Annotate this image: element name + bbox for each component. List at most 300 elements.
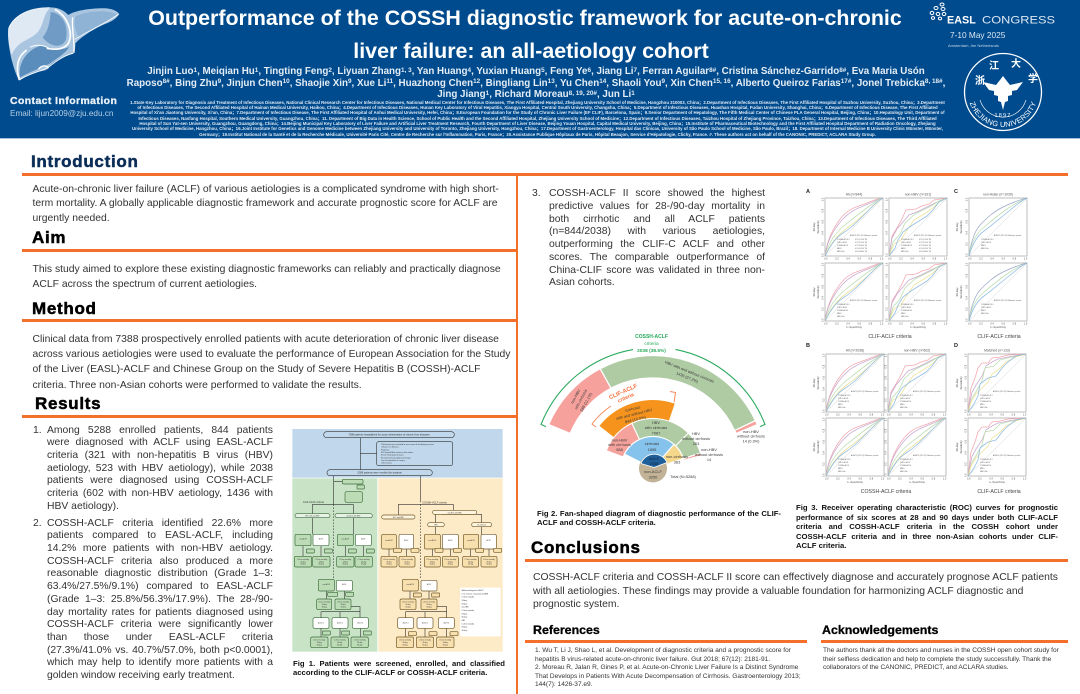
flow: labels: LT-free mortality <box>419 639 431 642</box>
panel B/D plots: 0.0 0.2 0.4 0.6 0.8 1.0 <box>825 478 885 480</box>
text: results item 2: patients compared to EASL-ACLF, including <box>47 530 273 541</box>
text: conclusions: prognostic system. <box>533 599 619 610</box>
panel A/C plots: AUROC (95% CI) Difference p value <box>850 299 877 302</box>
panel B/D plots: 1−Specificity <box>909 480 925 484</box>
text: results item 2: COSSH-ACLF criteria were significantly lower <box>47 619 273 630</box>
fan: labels: HBV <box>692 431 700 436</box>
panel B/D plots: 0.0 0.2 0.4 0.6 0.8 1.0 <box>887 478 947 480</box>
panel A/C plots: COSSH-ACLF <box>837 309 848 312</box>
flow: labels: 90-day <box>322 606 327 608</box>
panel A/C plots: 1−Specificity <box>910 325 926 329</box>
flow: labels: 28-day <box>340 604 346 606</box>
text: aim: This study aimed to explore these existing diagnostic frameworks can reliably and practically diagnose <box>32 264 501 275</box>
affiliations: of Infectious Diseases, The Second Affiliated Hospital of Hainan Medical University, Haikou, China；4.Department of Infectious Diseases, Hunan Key Laboratory of Viral Hepatitis, Xiangya Hospital, Central South University, Changsha, China；5.Department of Infectious Diseases, Huashan Hospital, Fudan University, Shanghai, China；6.Department of Infectious Disease, The First Affiliated <box>137 105 938 110</box>
panel A/C plots: CLIF-C ACLF <box>901 241 911 244</box>
panel B/D plots: 0.0 0.2 0.4 0.6 0.8 1.0 <box>822 353 826 413</box>
flow: labels: ACLF-2 <box>422 622 428 625</box>
fan: labels: with cirrhosis <box>645 425 667 430</box>
ROC axis labels: 90-day <box>812 287 816 296</box>
Fig 3 caption: performance of six scores at 28 and 90 days under both CLIF-ACLF <box>796 512 1058 522</box>
flow: labels: ACLF <box>427 583 431 586</box>
panel A/C plots: 0.0 0.2 0.4 0.6 0.8 1.0 <box>886 197 888 257</box>
panel A/C plots: 0.0 0.2 0.4 0.6 0.8 1.0 <box>888 258 948 260</box>
flow: labels: 28-day <box>486 561 492 563</box>
panel A/C plots: AUROC (95% CI) Difference p value <box>994 234 1021 237</box>
flow: labels: 90-day <box>430 564 435 566</box>
text: results item 3 <box>532 188 766 288</box>
flow: labels: 28-day <box>300 561 306 563</box>
contact information <box>10 96 117 118</box>
text: results item 2: than those under EASL-ACLF criteria <box>47 632 273 643</box>
panel B/D plots: AUROC (95% CI) Difference p value <box>993 454 1020 457</box>
flow: labels: LT-free mortality <box>334 639 346 642</box>
panel A/C plots: CLIF-C ACLF <box>837 306 847 309</box>
text: references <box>535 647 801 688</box>
heading: References: References <box>533 623 600 637</box>
ROC axis labels: 28-day <box>812 378 816 387</box>
flow: labels: LT-free mortality <box>315 558 327 561</box>
flow: labels: 90-day <box>317 644 322 646</box>
fan: outer ring COSSH-ACLF <box>549 356 757 433</box>
Fig 3 caption: COSSH-ACLF criteria and in three non-Asian cohorts under CLIF- <box>796 532 1058 540</box>
flow: labels: ACLF <box>404 539 408 542</box>
text: results item 3: (n=844/2038) with various aetiologies, <box>549 226 765 237</box>
panel B/D plots: MELD-Na <box>838 471 845 473</box>
panel A/C plots: 0.0 0.2 0.4 0.6 0.8 1.0 <box>966 262 968 322</box>
flow: labels: 90-day: <box>462 630 468 632</box>
text: acknowledgements: collaborators of the CANONIC, PREDICT, and ACLARA studies. <box>823 664 1009 671</box>
flow: labels: LT-free mortality <box>439 639 451 642</box>
fan: labels: 588 <box>616 447 623 452</box>
EASL congress logo: 7-10 May 2025 <box>950 30 1006 40</box>
panel B/D plots: MELD-Na <box>980 407 987 409</box>
panel B/D plots: COSSH-ACLF <box>900 400 911 403</box>
flow: labels: HCC with HBV <box>393 516 405 519</box>
panel A/C plots: 0.70 (0.67-0.73) <box>919 248 931 250</box>
panel B/D plots: 0.0 0.2 0.4 0.6 0.8 1.0 <box>964 353 968 413</box>
flow: yellow branch boxes <box>381 510 502 648</box>
text: acknowledgements <box>823 647 1059 671</box>
ROC axis labels: 28-day <box>955 378 959 387</box>
panel B/D plots: COSSH-ACLF II <box>838 394 851 397</box>
text: references: hepatitis B virus-related acute-on-chronic liver failure. Gut 2018; 67(12): 2181-91. <box>535 656 770 663</box>
panel B/D plots: MELD <box>900 468 905 470</box>
flow: labels: <18 years or >80 years <box>381 446 399 449</box>
affiliations: Infectious Diseases, Nanfang Hospital, Southern Medical University, Guangzhou, China；11. Department of Big Data in Health Science, School of Public Health and the Second Affiliated Hospital, Zhejiang University School of Medicine；12.Department of Infectious Diseases, Taizhou Hospital of Zhejiang Province, Taizhou, China；13.Department of Infectious Diseases, The Third Affiliated <box>138 116 937 121</box>
flow: labels: 28-day <box>405 604 411 606</box>
flow: labels: 90-day <box>422 644 428 646</box>
flow: labels: 28-day <box>337 642 342 644</box>
icon: Zhejiang University seal: 大 <box>1011 57 1021 70</box>
authors: Jinjin Luo1, Meiqian Hu1, Tingting Feng2, Liyuan Zhang1, 3, Yan Huang4, Yuxian Huang5, Feng Ye6, Jiang Li7, Ferran Aguilar8#, Cristina Sánchez-Garrido8#, Eva Maria Usón <box>147 66 925 77</box>
affiliations: Germany；19.Institut National de la Santé et de la Recherche Médicale, Université Paris Cité, Centre de Recherche sur l'Inflammation, Paris, France；20.Assistance Publique Hôpitaux de Paris, Hôpital Beaujon, Service d'Hépatologie, Clichy, France. #. These authors act on behalf of the CANONIC, PREDICT, ACLARA Study Group. <box>199 132 876 137</box>
icon: Zhejiang University seal: 学 <box>1028 72 1038 85</box>
panel A/C plots: COSSH-ACLF <box>901 244 912 247</box>
text: method: Clinical data from 7388 prospectively enrolled patients with acute deterioration of chronic liver disease <box>32 334 499 345</box>
fan: labels: 263 <box>693 441 699 446</box>
heading: Acknowledgements: Acknowledgements <box>822 623 938 637</box>
flow: labels: LT-free mortality <box>402 601 414 604</box>
Fig 2 fan diagram <box>540 334 766 482</box>
text: conclusions: with all aetiologies. These findings may provide a valuable foundation for harmonizing ACLF diagnostic and <box>533 586 1023 597</box>
panel B/D plots: 0.0 0.2 0.4 0.6 0.8 1.0 <box>884 353 888 413</box>
Fig 3 caption <box>796 503 1058 550</box>
text: introduction: urgently needed. <box>32 213 110 224</box>
flow: labels: 28-day: <box>462 600 468 602</box>
flow: labels: 90-day <box>486 564 492 566</box>
panel A/C plots: 0.0 0.2 0.4 0.6 0.8 1.0 <box>822 197 824 257</box>
panel A/C plots: AUROC (95% CI) Difference p value <box>914 234 941 237</box>
EASL congress logo: Amsterdam, the Netherlands <box>948 43 999 48</box>
flow: labels: non-ACLF <box>407 583 414 586</box>
flow: screening boxes <box>324 432 454 476</box>
flow: labels: ACLF <box>319 537 323 540</box>
flow: labels: ACLF <box>487 539 491 542</box>
flow: labels: LT-free mortality <box>313 639 325 642</box>
flow: labels: 2100 patients were excluded for one or more of the following reasons: <box>381 443 435 446</box>
flow: labels: 28-day <box>402 642 408 644</box>
panel B/D plots: 1−Specificity <box>847 480 863 484</box>
flow: labels: 90-day <box>443 644 448 646</box>
panel A/C plots: 0.75 (0.72-0.78) <box>855 239 867 241</box>
text: results item 1: criteria (602 with non-HBV aetiology, 1436 with <box>47 488 273 499</box>
panel B/D plots: CLIF-C ACLF <box>980 397 990 400</box>
flow: labels: HBV <box>434 525 439 527</box>
fan: labels: Total (N=5288) <box>670 474 697 479</box>
ROC panel captions: COSSH-ACLF criteria <box>861 489 911 495</box>
flow: labels: LT-free mortality <box>483 558 495 561</box>
fan: labels <box>568 334 765 480</box>
fan: labels: 14 (0.3%) <box>743 438 760 444</box>
flow: labels: ACLF-1 <box>318 622 324 625</box>
heading: Conclusions: Conclusions <box>531 538 641 557</box>
flow: labels: 28-day <box>448 561 453 563</box>
text: method: across various aetiologies were used to evaluate the performance of European Association for the Study <box>32 349 510 360</box>
EASL congress logo: EASL <box>947 14 976 26</box>
text: aim <box>32 264 501 290</box>
panel A/C plots: COSSH-ACLF II <box>837 303 850 306</box>
panel B/D plots: MELD <box>980 404 985 406</box>
flow: labels: non-ACLF <box>429 539 436 542</box>
flow: labels: Pregnancy <box>381 448 389 451</box>
ROC axis labels: 28-day <box>812 222 816 231</box>
flow: labels: 28-day: <box>462 627 468 629</box>
flow: labels: 90-day <box>357 644 362 646</box>
Fig 3 caption: Fig 3. Receiver operating characteristic (ROC) curves for prognostic <box>796 503 1058 512</box>
flow: labels: non-ACLF <box>385 539 393 542</box>
panel B/D plots: COSSH-ACLF <box>838 400 849 403</box>
panel B/D plots: 0.0 0.2 0.4 0.6 0.8 1.0 <box>967 478 1027 480</box>
text: conclusions: COSSH-ACLF criteria and COSSH-ACLF II score can effectively diagnose and accurately prognose ACLF patients <box>533 572 1058 583</box>
flow: labels: 90-day <box>405 606 411 608</box>
flow: labels: Additional diagnosis of ACLF <box>462 589 484 592</box>
header banner <box>0 0 1080 139</box>
panel letters: B <box>806 343 810 349</box>
text: results item 3: outperforming the CLIF-C ACLF and other <box>549 239 765 250</box>
flow: labels: 90-day <box>337 644 342 646</box>
panel A/C plots: CLIF-C ACLF <box>981 306 991 309</box>
panel B/D plots: MELD-Na <box>900 471 907 473</box>
panel A/C plots: COSSH-ACLF <box>837 244 848 247</box>
title <box>148 6 902 62</box>
panel letters: C <box>954 189 958 195</box>
text: references: That Develops in Patients With Acute Decompensation of Cirrhosis. Gastroenterology 2013; <box>535 673 801 680</box>
ROC panel captions: CLIF-ACLF criteria <box>977 489 1021 495</box>
flow: labels: LT-free mortality <box>383 558 395 561</box>
flow: labels: 28-day <box>422 642 428 644</box>
panel A/C plots: COSSH-ACLF <box>901 309 912 312</box>
panel A/C plots: 0.0 0.2 0.4 0.6 0.8 1.0 <box>968 322 1028 326</box>
text: acknowledgements: The authors thank all the doctors and nurses in the COSSH open cohort study for <box>823 647 1059 654</box>
flow: labels: 90-day <box>300 564 306 566</box>
flow: labels: LT-free mortality <box>423 601 435 604</box>
fan: labels: Cirrhosis <box>625 404 641 413</box>
panel A/C plots: CLIF-C ACLF <box>837 241 847 244</box>
flow: labels: LT-free mortality <box>462 609 474 612</box>
panel B/D plots: COSSH-ACLF II <box>900 394 913 397</box>
panel B/D plots: 0.0 0.2 0.4 0.6 0.8 1.0 <box>887 414 947 416</box>
panel B/D plots: COSSH-ACLF II <box>980 394 993 397</box>
panel A/C plots: 0.0 0.2 0.4 0.6 0.8 1.0 <box>824 258 884 260</box>
fan: labels: criteria <box>644 341 659 347</box>
text: results item 3: scores. The comparable outperformance of <box>549 252 765 263</box>
ROC axis labels: Sensitivity <box>959 220 963 234</box>
ROC axis labels: Sensitivity <box>959 376 963 390</box>
text: results item 2: (Grade 1–3: 25.8%/56.3%/17.9%). The 28-/90- <box>47 594 273 605</box>
fan: labels: non-HBV <box>701 447 717 452</box>
icon: Zhejiang University seal: 1897 <box>994 113 1012 119</box>
text: results item 1: Among 5288 enrolled patients, 844 patients <box>47 425 273 436</box>
panel B/D plots: 0.0 0.2 0.4 0.6 0.8 1.0 <box>967 414 1027 416</box>
flow: labels: 90-day <box>343 564 348 566</box>
ROC axis labels: Sensitivity <box>816 220 820 234</box>
fan: labels: non-cirrhosis <box>666 454 688 459</box>
panel A/C plots: 0.0 0.2 0.4 0.6 0.8 1.0 <box>888 322 948 326</box>
text: results item 2: golden window receiving early treatment. <box>47 670 235 681</box>
panel A/C plots: 0.0 0.2 0.4 0.6 0.8 1.0 <box>822 262 824 322</box>
icon: Zhejiang University seal: ZHEJIANG UNIVERSITY <box>970 101 1036 128</box>
Fig 2 caption: ACLF and COSSH-ACLF criteria. <box>537 518 656 527</box>
panel B/D plots: COSSH-ACLF II <box>900 458 913 461</box>
fan: CLIF orange ring <box>599 399 676 438</box>
text: results item 3: predictive values for 28-/90-day mortality in <box>549 201 765 212</box>
flow: labels: LT-free mortality <box>399 639 411 642</box>
panel B/D plots: MELD <box>980 468 985 470</box>
flow: labels: non-ACLF <box>323 583 330 586</box>
ROC axis labels: 90-day <box>812 442 816 451</box>
EASL congress logo <box>930 2 1055 48</box>
panel B/D plots: AUROC (95% CI) Difference p value <box>913 390 940 393</box>
text: introduction: term mortality. A globally applicable diagnostic framework and accurate prognostic score for ACLF are <box>32 198 498 209</box>
flow: labels: 28-day <box>319 561 324 563</box>
flow: labels: 90-day <box>319 564 324 566</box>
panel A/C plots: MELD <box>837 313 842 315</box>
panel A/C plots: COSSH-ACLF II <box>981 303 994 306</box>
authors: Jing Jiang1, Richard Moreau8, 19, 20#, Jun Li1 <box>437 89 635 100</box>
fan: labels: non-HBV <box>569 388 581 405</box>
panel A/C plots: 0.69 (0.66-0.72) <box>855 251 867 253</box>
text: results item 1: aetiology, 523 with HBV aetiology), while 2038 <box>47 463 273 474</box>
panel A/C plots: 0.69 (0.66-0.72) <box>919 251 931 253</box>
flow: labels: 90-day <box>468 564 473 566</box>
flow: labels: LT-free mortality <box>337 601 349 604</box>
flow: labels: non-ACLF <box>299 537 307 540</box>
fan: labels: 383 <box>674 460 680 464</box>
panel A/C plots: non-HBV (n=321) <box>905 192 931 196</box>
panel A/C plots: MELD-Na <box>837 251 844 253</box>
text: results item 3: COSSH-ACLF II score showed the highest <box>549 188 765 199</box>
panel A/C plots: COSSH-ACLF II <box>837 238 850 241</box>
panel B/D plots: COSSH-ACLF <box>900 464 911 467</box>
flow: labels: LT-free mortality <box>358 558 370 561</box>
fan: labels: criteria <box>617 392 635 405</box>
text: results item 1 <box>33 425 273 512</box>
flow: labels: Liver transplantation or surgery <box>381 459 405 462</box>
fan: labels: 844 (16.0%) <box>624 414 647 424</box>
panel A/C plots: 1−Specificity <box>846 325 862 329</box>
text: references: 1. Wu T, Li J, Shao L, et al. Development of diagnostic criteria and a prognostic score for <box>535 647 791 654</box>
text: results item 2: reasonable diagnostic distribution (Grade 1–3: <box>47 568 273 579</box>
text: method: of the Liver (EASL)-ACLF and Chinese Group on the Study of Severe Hepatitis B (COSSH)-ACLF <box>32 364 480 375</box>
flow: labels: 28-day <box>357 642 362 644</box>
fan: labels: HBV <box>652 420 660 425</box>
affiliations: 1.State Key Laboratory for Diagnosis and Treatment of Infectious Diseases, National Clinical Research Center for Infectious Diseases, National Medical Center for Infectious Diseases, The First Affiliated Hospital, Zhejiang University School of Medicine, Hangzhou 310003, China；2.Department of Infectious Diseases, The First Affiliated Hospital of Suzhou University, Suzhou, China；3.Department <box>130 100 945 104</box>
flow: labels: 90-day <box>404 564 410 566</box>
fan: labels: non-HBV <box>612 438 628 442</box>
Fig 3 caption: criteria and COSSH-ACLF criteria in the COSSH cohort under <box>796 522 1058 531</box>
panel B/D plots: CLIF-C ACLF <box>838 397 848 400</box>
text: conclusions <box>533 572 1058 610</box>
panel B/D plots: COSSH-ACLF <box>980 400 991 403</box>
panel B/D plots: All (n=2038) <box>846 348 864 352</box>
panel B/D plots: 1−Specificity <box>989 480 1005 484</box>
flow: labels: non-ACLF <box>342 537 349 540</box>
text: results item 2: COSSH-ACLF criteria also produced a more <box>47 556 273 567</box>
text: results item 1: were diagnosed with ACLF using EASL-ACLF <box>47 437 273 448</box>
Fig 1 caption: Fig 1. Patients were screened, enrolled, and classified <box>293 659 505 668</box>
contact information: Contact Information <box>10 96 117 107</box>
text: introduction <box>32 184 499 224</box>
flow: labels: 28-day <box>430 561 435 563</box>
panel B/D plots: COSSH-ACLF II <box>980 458 993 461</box>
flow: labels: ACLF <box>342 583 346 586</box>
flow: labels: 28-day <box>317 642 322 644</box>
panel A/C plots: MELD-Na <box>981 248 988 250</box>
text: introduction: Acute-on-chronic liver failure (ACLF) of various aetiologies is a complicated syndrome with high short- <box>32 184 499 195</box>
flow: labels: No cirrhosis <box>477 525 486 527</box>
flow: labels: HCC beyond Milan criteria or other tumors <box>381 451 413 454</box>
flow: labels: 90-day <box>340 606 346 608</box>
panel A/C plots: 0.0 0.2 0.4 0.6 0.8 1.0 <box>824 322 884 326</box>
authors <box>127 66 945 100</box>
flow: labels: 90-day <box>386 564 392 566</box>
panel A/C plots: All (n=844) <box>846 192 862 196</box>
panel B/D plots: AUROC (95% CI) Difference p value <box>913 454 940 457</box>
panel B/D plots: AUROC (95% CI) Difference p value <box>851 390 878 393</box>
panel B/D plots: MELD-Na <box>980 471 987 473</box>
panel B/D plots: MELD <box>900 404 905 406</box>
panel B/D plots: AUROC (95% CI) Difference p value <box>851 454 878 457</box>
text: references: 144(7): 1426-37.e9. <box>535 681 593 688</box>
flow: labels: HBV <box>462 620 466 622</box>
text: results item 1: criteria (321 with non-hepatitis B virus (HBV) <box>47 450 273 461</box>
fan: labels: CLIF-ACLF <box>608 383 639 401</box>
flow: labels: CLIF-ACLF criteria <box>303 501 324 504</box>
fan: labels: 2038 (38.5%) <box>637 348 666 354</box>
ROC axis labels: 90-day <box>955 442 959 451</box>
flow: labels: LT-free mortality <box>426 558 438 561</box>
flow: labels: 7388 patients hospitalized for acute deterioration of chronic liver diseases <box>348 434 430 437</box>
flow: labels: 28-day <box>426 604 432 606</box>
fan: labels: with cirrhosis <box>608 442 631 447</box>
title: liver failure: an all-aetiology cohort <box>353 38 709 62</box>
panel A/C plots: 0.0 0.2 0.4 0.6 0.8 1.0 <box>886 262 888 322</box>
ROC axis labels: Sensitivity <box>959 285 963 299</box>
text: results item 3: both cirrhotic and all ACLF patients <box>549 214 765 224</box>
panel letters: A <box>806 189 810 195</box>
flow: labels: non-HCC with HBV <box>346 515 361 518</box>
fan: labels: without cirrhosis <box>695 452 723 457</box>
fan: labels: ACLF <box>649 456 660 461</box>
panel B/D plots: 0.0 0.2 0.4 0.6 0.8 1.0 <box>884 417 888 477</box>
affiliations <box>130 100 945 137</box>
panel B/D plots: CLIF-C ACLF <box>900 461 910 464</box>
affiliations: University School of Medicine, Hangzhou, China；16.Joint Institute for Genetics and Genome Medicine between Zhejiang University and University of Toronto, Zhejiang University, Hangzhou, China；17.Department of Gastroenterology, Hospital das Clinicas, University of São Paulo School of Medicine, São Paulo, Brazil；18. Department of Internal Medicine B University Clinic Münster, Münster, <box>132 126 943 131</box>
panel A/C plots: 0.70 (0.67-0.73) <box>855 248 867 250</box>
ROC axis labels: Sensitivity <box>816 440 820 454</box>
panel B/D plots: CLIF-C ACLF <box>838 461 848 464</box>
panel A/C plots: CLIF-C ACLF <box>981 241 991 244</box>
panel A/C plots: CLIF-C ACLF <box>901 306 911 309</box>
text: references: 2. Moreau R, Jalan R, Gines P, et al. Acute-on-Chronic Liver Failure Is a Distinct Syndrome <box>535 664 798 671</box>
panel B/D plots: MELD <box>838 468 843 470</box>
panel B/D plots: 0.0 0.2 0.4 0.6 0.8 1.0 <box>964 417 968 477</box>
flow: labels <box>297 434 495 646</box>
text: results item 2: 2. <box>33 518 42 529</box>
flow: labels: non-ACLF <box>467 539 475 542</box>
panel A/C plots: 0.0 0.2 0.4 0.6 0.8 1.0 <box>966 197 968 257</box>
fan: labels: without cirrhosis <box>682 436 710 441</box>
flow: labels: Severe extrahepatic diseases <box>381 454 404 457</box>
panel A/C plots: COSSH-ACLF II <box>901 238 914 241</box>
panel B/D plots <box>822 348 1027 484</box>
flow: labels: ACLF <box>361 537 365 540</box>
flow: labels: ACLF-3 <box>443 622 449 625</box>
text: results item 1: patients were diagnosed using COSSH-ACLF <box>47 475 273 486</box>
text: results item 3: China-CLIF score was validated in three non- <box>549 264 765 276</box>
text: results item 2: 63.4%/27.5%/9.1%) compared to EASL-ACLF <box>47 581 273 592</box>
flow: labels: 28-day <box>343 561 348 563</box>
flow: labels: LT-free mortality <box>318 601 330 604</box>
panel B/D plots: CLIF-C ACLF <box>900 397 910 400</box>
text: results item 2: (27.3%/41.0% vs. 40.7%/57.0%, both p<0.0001), <box>47 645 273 656</box>
flow: labels: 28-day <box>386 561 392 563</box>
text: results item 2: 14.2% more patients with non-HBV aetiology. <box>47 543 273 554</box>
title: Outperformance of the COSSH diagnostic framework for acute-on-chronic <box>148 6 902 30</box>
fan: labels: non-HBV <box>743 429 759 434</box>
ROC axis labels: 90-day <box>955 287 959 296</box>
heading: Results: Results <box>35 394 101 413</box>
panel B/D plots: MELD <box>838 404 843 406</box>
flow: labels: 90-day <box>426 606 432 608</box>
fan: labels: HBV with and without cirrhosis <box>664 359 715 384</box>
panel B/D plots: non-HBV (n=602) <box>904 348 930 352</box>
fan: third ring <box>606 418 701 460</box>
fan: labels: non-ACLF <box>644 469 662 474</box>
flow: labels: 28-day <box>468 561 473 563</box>
flow: labels: LT-free mortality <box>462 596 474 599</box>
flow: labels: 28-day <box>404 561 410 563</box>
